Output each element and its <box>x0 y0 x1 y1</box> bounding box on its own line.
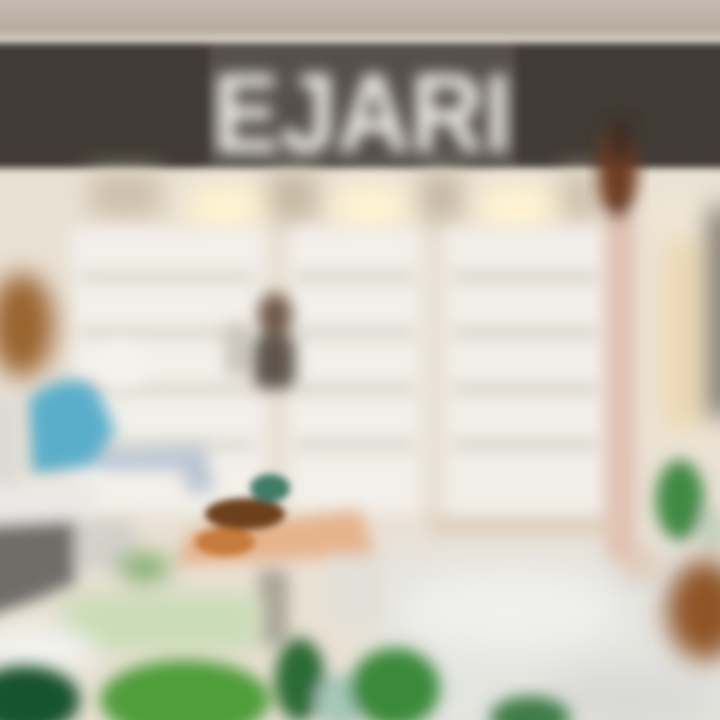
column <box>598 120 638 560</box>
person: left, head <box>0 273 54 377</box>
sign lettering: EJARI <box>212 51 512 176</box>
bowl with plant <box>195 474 290 556</box>
panel: right shelving <box>430 228 610 535</box>
person: left, body <box>28 343 215 495</box>
sofa <box>0 400 135 620</box>
wall lights <box>90 172 600 234</box>
person: middle <box>225 293 295 389</box>
coffee table <box>175 510 380 645</box>
planter: right <box>620 551 720 660</box>
plant: foreground left <box>0 638 440 720</box>
dark sign band <box>0 43 720 168</box>
plant: foreground right <box>490 696 570 720</box>
right wall <box>650 190 720 450</box>
floor <box>370 550 720 720</box>
foreground rug <box>0 556 260 674</box>
panel: middle shelving <box>290 228 420 513</box>
ceiling band <box>0 0 720 36</box>
plant: right <box>656 460 720 554</box>
panel: left shelving <box>72 228 264 513</box>
